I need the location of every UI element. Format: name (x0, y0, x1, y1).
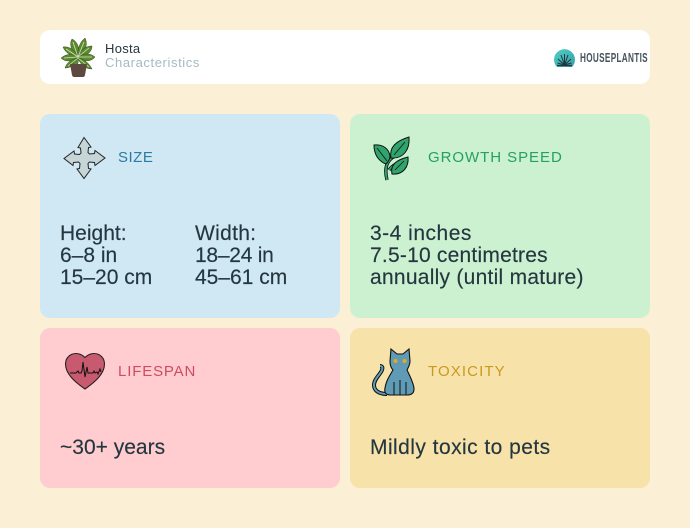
logo: Houseplantis (554, 49, 648, 67)
text: height: 15–20 cm (60, 266, 152, 289)
text: growth rate: 7.5-10 centimetres (370, 244, 548, 267)
text: toxicity note: Mildly toxic to pets (370, 436, 551, 459)
title: Hosta (105, 41, 140, 56)
text: width (195, 222, 287, 289)
text: growth rate (370, 222, 584, 289)
icon: heart with pulse (64, 353, 105, 390)
icon: potted hosta plant (61, 38, 96, 77)
icon: sitting cat (372, 348, 415, 396)
heading: growth speed: GROWTH SPEED (428, 149, 563, 166)
text: lifespan value: ~30+ years (60, 436, 165, 459)
text: height: 6–8 in (60, 244, 117, 267)
text: width: 18–24 in (195, 244, 274, 267)
logo wordmark: HOUSEPLANTIS (580, 50, 648, 65)
icon: four-way arrows (63, 136, 106, 180)
text: height: Height: (60, 222, 127, 245)
text: growth rate: 3-4 inches (370, 222, 472, 245)
text: growth rate: annually (until mature) (370, 266, 584, 289)
heading: size: SIZE (118, 149, 153, 166)
icon: logo mark (554, 49, 575, 67)
panel: toxicity (350, 328, 650, 488)
subtitle: Characteristics (105, 55, 200, 70)
heading: toxicity: TOXICITY (428, 363, 506, 380)
icon: leafy sprout (374, 136, 410, 180)
header bar (40, 30, 650, 84)
text: height (60, 222, 152, 289)
text: width: Width: (195, 222, 256, 245)
heading: lifespan: LIFESPAN (118, 363, 196, 380)
panel: size (40, 114, 340, 318)
text: width: 45–61 cm (195, 266, 287, 289)
panel: lifespan (40, 328, 340, 488)
panel: growth speed (350, 114, 650, 318)
